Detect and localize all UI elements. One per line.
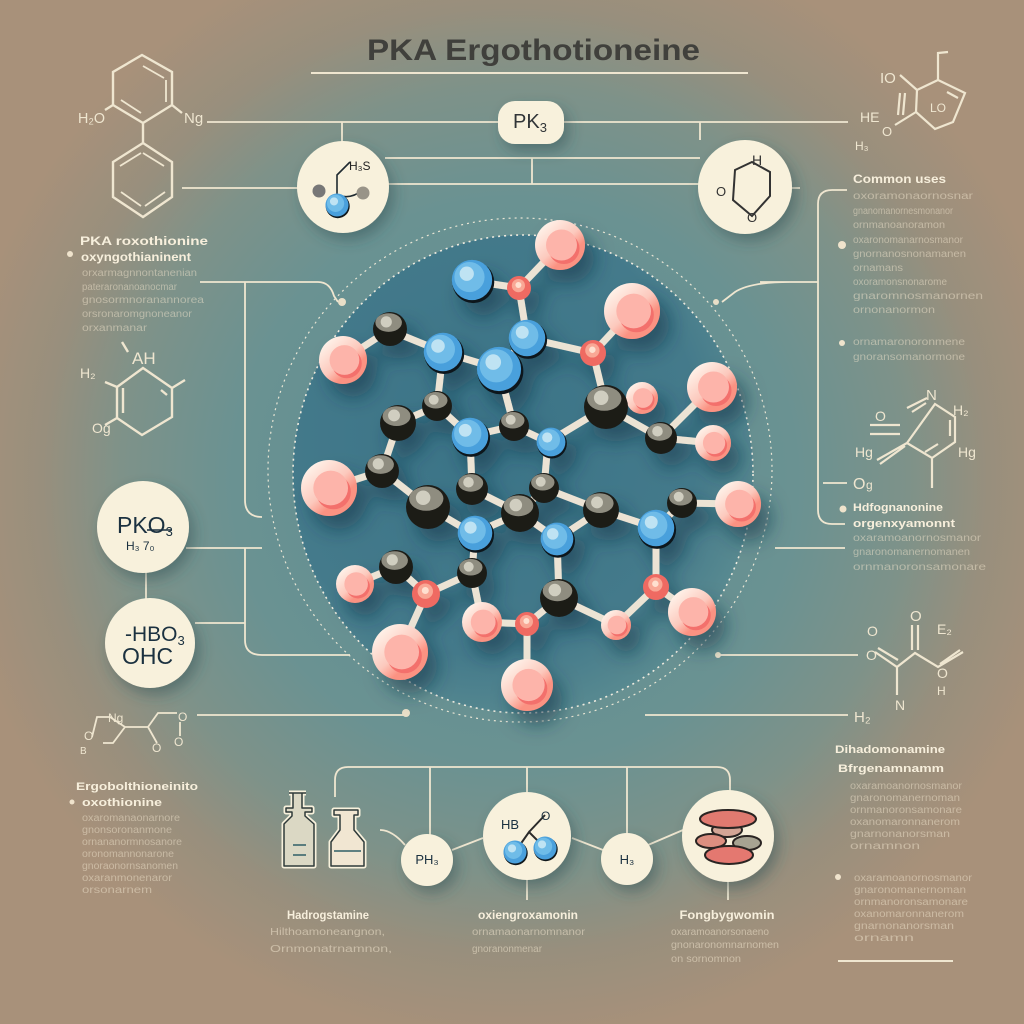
badge: HBO3 OHC: -HBO: [125, 623, 178, 646]
caption: middle: [472, 908, 586, 955]
text block: right middle: Hdfognanonine: [853, 502, 943, 514]
caption: left: Hilthoamoneangnon,: [270, 927, 385, 938]
icon: molecule circle bottom: O: [541, 809, 550, 823]
structure: top right ring: O: [882, 124, 892, 139]
text block: PKA left: gnosormnoranannorea: [82, 295, 205, 306]
structure: right pyrimidine: O: [875, 408, 886, 424]
text block: right bottom: oxaramoanornosmanor: [850, 781, 963, 792]
icon: vials: [284, 793, 364, 866]
caption: left: Ornmonatrnamnon,: [270, 944, 392, 955]
caption: middle: oxiengroxamonin: [478, 908, 578, 922]
structure: right lower chain: [854, 608, 963, 726]
text block: common uses right: ornamans: [853, 263, 903, 274]
text block: right bottom: ornmanoronsamonare: [854, 897, 969, 908]
structure: right pyrimidine: [853, 387, 976, 493]
text block: common uses right: ornonanormon: [853, 305, 935, 316]
bottom right rule: [838, 960, 953, 962]
badge: HBO3 OHC: OHC: [122, 643, 173, 669]
title: PKA Ergothotioneine: [367, 34, 700, 67]
text block: lower left: gnonsoronanmone: [82, 825, 172, 836]
structure: right pyrimidine: Hg: [958, 444, 976, 460]
badge: PKO3: H₃ 7₀: [126, 539, 155, 553]
structure: top right ring: [855, 52, 965, 153]
icon: ring circle top right: O: [747, 210, 757, 225]
text block: PKA left: PKA roxothionine: [80, 234, 208, 248]
text block: lower left: gnoraonornsanomen: [82, 861, 178, 872]
structure: right pyrimidine: O: [853, 476, 865, 493]
text block: right bottom: gnaronomanernoman: [854, 885, 966, 896]
text block: lower left: ornananormnosanore: [82, 837, 182, 848]
structure: lower left chain: O: [152, 741, 161, 755]
atoms red: [412, 276, 669, 636]
structure: left cyclohexane: AH: [132, 349, 156, 368]
atoms blue: [424, 260, 676, 558]
structure: left cyclohexane: Og: [92, 420, 111, 436]
text block: common uses right: oxoramonsnonarome: [853, 277, 947, 288]
text block: lower left: oronomannonarone: [82, 849, 174, 860]
text block: PKA left: oxyngothianinent: [81, 250, 191, 264]
text block: PKA left: orxanmanar: [82, 323, 148, 334]
text block: common uses right: gnaromnosmanornen: [853, 291, 983, 302]
text block: common uses right: gnoransomanormone: [853, 352, 966, 363]
text block: right bottom: oxanomaronnanerom: [854, 909, 964, 920]
caption: middle: ornamaonarnomnanor: [472, 927, 586, 938]
structure: lower left chain: Ng: [108, 711, 123, 725]
caption: left: Hadrogstamine: [287, 908, 369, 922]
icon: ring circle top right: [698, 140, 792, 234]
icon: molecule circle top left: [297, 141, 389, 233]
icon: ring circle top right: O: [716, 184, 726, 199]
icon: molecule circle bottom: [483, 792, 571, 880]
structure: top right ring: H₃: [855, 139, 869, 153]
structure: right lower chain: H: [937, 684, 946, 698]
structure: right pyrimidine: Hg: [855, 444, 873, 460]
caption: left: [270, 908, 392, 955]
text block: right bottom: oxanomaronnanerom: [850, 817, 960, 828]
text block: right bottom: gnarnonanorsman: [854, 921, 954, 932]
structure: left cyclohexane: [80, 342, 185, 436]
text block: right bottom: Dihadomonamine: [835, 744, 945, 756]
text block: right middle: [840, 502, 987, 573]
caption: right: on sornomnon: [671, 954, 741, 965]
text block: right bottom: ornamn: [854, 933, 914, 944]
text block: right bottom: [835, 744, 973, 944]
structure: top right ring: LO: [930, 101, 946, 115]
text block: right middle: orgenxyamonnt: [853, 518, 955, 530]
badge: H3: H₃: [620, 852, 634, 867]
structure: lower left chain: O: [178, 710, 187, 724]
text block: lower left: oxaranmonenaror: [82, 873, 173, 884]
text block: right middle: gnaronomanernomanen: [853, 547, 970, 558]
structure: top left biphenyl: Ng: [184, 110, 203, 127]
text block: right bottom: ornamnon: [850, 841, 920, 852]
text block: common uses right: oxaronomanarnosmanor: [853, 235, 964, 246]
structure: right pyrimidine: g: [866, 478, 873, 492]
bonds: [329, 245, 738, 685]
text block: right bottom: oxaramoanornosmanor: [854, 873, 973, 884]
icon: molecule circle top left: H₃S: [349, 159, 371, 173]
text block: lower left: [70, 781, 198, 896]
pill label PK3: 3: [540, 120, 547, 135]
caption: right: Fongbygwomin: [680, 908, 774, 922]
badge: PH3: [401, 834, 453, 886]
text block: right bottom: Bfrgenamnamm: [838, 763, 944, 775]
molecule: [301, 220, 761, 711]
text block: PKA left: orxarmagnnontanenian: [82, 268, 197, 279]
structure: top right ring: IO: [880, 70, 896, 87]
pill label PK3: PK: [513, 111, 540, 133]
text block: right bottom: ornmanoronsamonare: [850, 805, 962, 816]
structure: top right ring: HE: [860, 109, 879, 125]
atoms pink: [301, 220, 761, 711]
icon: tissue circle: [682, 790, 774, 882]
text block: lower left: oxaromanaonarnore: [82, 813, 180, 824]
structure: right lower chain: O: [867, 623, 878, 639]
icon: molecule circle bottom: HB: [501, 817, 519, 832]
caption: right: [671, 908, 779, 965]
text block: common uses right: gnanomanornesmonanor: [853, 206, 954, 217]
badge: PKO3: [97, 481, 189, 573]
structure: right lower chain: H₂: [854, 709, 871, 726]
structure: right lower chain: E₂: [937, 621, 952, 637]
structure: right lower chain: O: [910, 608, 922, 625]
text block: common uses right: ornamaronoronmene: [853, 337, 966, 348]
badge: PH3: PH₃: [415, 852, 439, 867]
central disc: [268, 218, 772, 722]
text block: common uses right: oxoramonaornosnar: [853, 191, 974, 202]
badge: H3: [601, 833, 653, 885]
caption: right: oxaramoanorsonaeno: [671, 927, 769, 938]
structure: lower left chain: B: [80, 746, 87, 757]
text block: common uses right: ornmanoanoramon: [853, 220, 945, 231]
text block: PKA left: pateraronanoanocmar: [82, 282, 178, 293]
pill label PK3: [498, 101, 564, 144]
atoms black: [365, 312, 697, 617]
connector lines: [146, 122, 858, 900]
text block: lower left: orsonarnem: [82, 885, 152, 896]
text block: common uses right: gnornanosnonamanen: [853, 249, 966, 260]
icon: ring circle top right: H: [752, 152, 762, 168]
text block: PKA left: orsronaromgnoneanor: [82, 309, 193, 320]
structure: lower left chain: [80, 710, 187, 757]
structure: lower left chain: O: [174, 735, 183, 749]
badge: PKO3: PKO: [117, 512, 166, 538]
structure: top left biphenyl: H₂O: [78, 110, 105, 127]
text block: common uses right: [838, 172, 983, 363]
caption: right: gnonaronomnarnomen: [671, 940, 779, 951]
text block: lower left: Ergobolthioneinito: [76, 781, 198, 793]
badge: HBO3 OHC: [105, 598, 195, 688]
badge: PKO3: 3: [166, 524, 173, 539]
structure: lower left chain: O: [84, 729, 93, 743]
structure: right lower chain: O: [937, 665, 948, 681]
badge: HBO3 OHC: 3: [178, 633, 185, 648]
caption: middle: gnoranonmenar: [472, 944, 543, 955]
text block: lower left: oxothionine: [82, 797, 162, 809]
text block: right middle: ornmanoronsamonare: [853, 562, 987, 573]
structure: right lower chain: O: [866, 647, 877, 663]
structure: right lower chain: N: [895, 697, 905, 713]
text block: common uses right: Common uses: [853, 172, 946, 186]
text block: right middle: oxaramoanornosmanor: [853, 533, 982, 544]
text block: PKA left: [67, 234, 208, 334]
text block: right bottom: gnaronomanernoman: [850, 793, 960, 804]
structure: left cyclohexane: H₂: [80, 365, 96, 381]
text block: right bottom: gnarnonanorsman: [850, 829, 950, 840]
structure: right pyrimidine: N: [926, 387, 937, 404]
structure: right pyrimidine: H₂: [953, 402, 969, 418]
structure: top left biphenyl: [78, 55, 203, 217]
